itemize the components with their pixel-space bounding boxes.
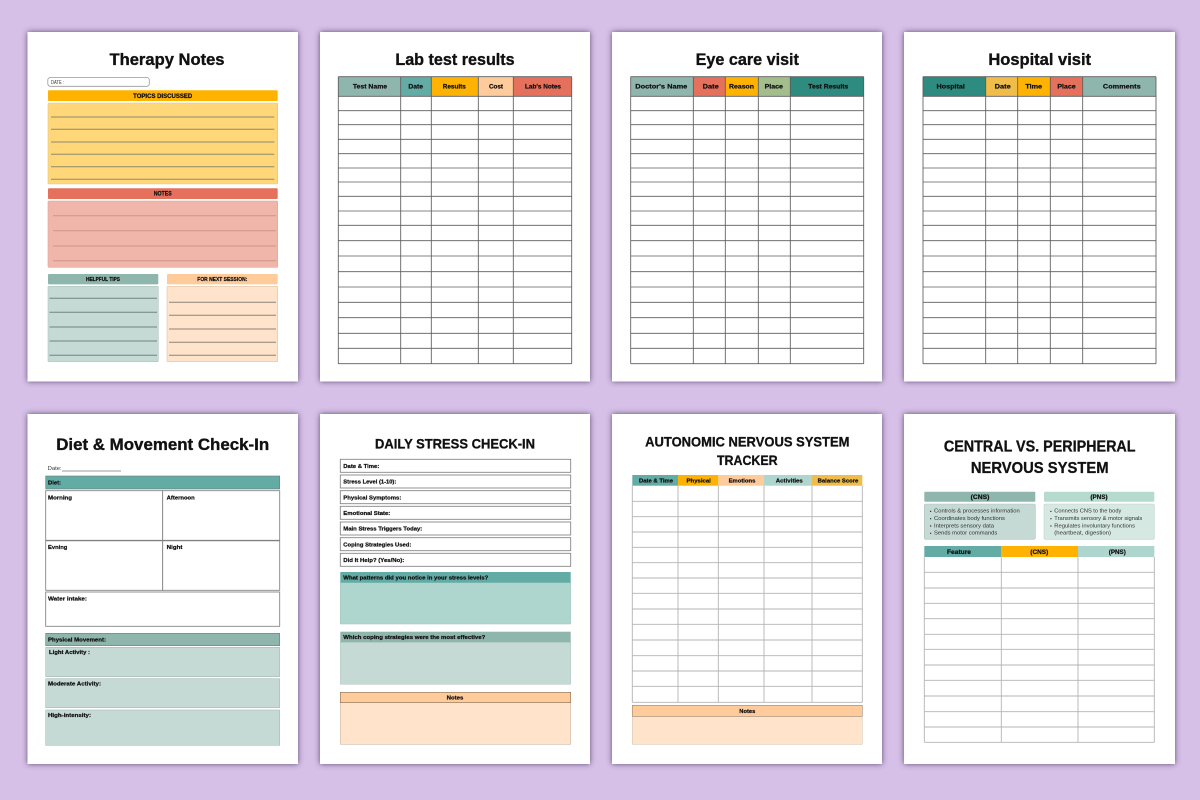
section: for next session: FOR NEXT SESSION:	[197, 277, 247, 283]
section: diet: Water intake:	[48, 597, 87, 603]
title: central vs peripheral	[944, 438, 1136, 477]
card: CNS: Sends motor commands	[934, 531, 998, 537]
section: diet: Night	[167, 545, 183, 551]
table: eye care visit: Doctor's Name	[635, 85, 688, 91]
table: tracker: Physical	[687, 478, 711, 484]
card: CNS: Interprets sensory data	[934, 523, 994, 529]
table: comparison: (CNS)	[1030, 550, 1048, 556]
table: eye care visit: Reason	[729, 85, 754, 91]
table: lab test results	[338, 77, 572, 364]
panel: hospital visit	[904, 32, 1175, 382]
table: tracker: Emotions	[729, 478, 755, 484]
section: physical movement: High-intensity:	[48, 713, 91, 719]
panel: central vs peripheral nervous system	[904, 414, 1175, 764]
date line: Date:	[48, 466, 62, 472]
card: PNS: (PNS)	[1090, 495, 1108, 501]
table: lab test results: Cost	[489, 85, 503, 91]
section: diet	[46, 476, 280, 626]
section: notes	[48, 188, 278, 267]
table: eye care visit	[631, 77, 864, 364]
card: PNS: Regulates involuntary functions	[1054, 523, 1135, 529]
title: autonomic nervous system tracker: AUTONOMIC NERVOUS SYSTEM	[645, 434, 849, 450]
title: central vs peripheral: NERVOUS SYSTEM	[971, 460, 1109, 477]
table: hospital visit: Place	[1057, 85, 1076, 91]
title: diet and movement: Diet & Movement Check-In	[56, 435, 269, 454]
table: comparison: Feature	[947, 550, 972, 556]
table: tracker	[632, 475, 862, 702]
section: helpful tips	[48, 274, 158, 362]
table: eye care visit: Date	[703, 85, 720, 91]
date field	[48, 78, 149, 86]
section: diet: Morning	[48, 495, 72, 501]
card: CNS: (CNS)	[971, 495, 989, 501]
date line	[48, 466, 121, 472]
section: notes	[632, 705, 862, 744]
card: PNS: (heartbeat, digestion)	[1054, 531, 1111, 537]
form fields: Coping Strategies Used:	[343, 542, 411, 548]
section: stress patterns: What patterns did you notice in your stress levels?	[343, 575, 489, 581]
table: tracker: Activities	[776, 478, 803, 484]
panel: therapy notes	[28, 32, 298, 382]
table: hospital visit: Date	[995, 85, 1012, 91]
section: diet: Diet:	[48, 480, 61, 486]
panel: lab test results	[320, 32, 590, 382]
table: eye care visit: Test Results	[808, 85, 849, 91]
table: tracker: Date & Time	[639, 478, 673, 484]
form fields: Emotional State:	[343, 511, 390, 517]
section: notes: NOTES	[154, 192, 172, 198]
form fields: Physical Symptoms:	[343, 495, 401, 501]
section: diet: Evning	[48, 545, 67, 551]
panel: eye care visit	[612, 32, 882, 382]
panel: diet and movement check-in	[28, 414, 298, 764]
title: autonomic nervous system tracker: TRACKER	[717, 452, 778, 468]
title: eye care visit: Eye care visit	[696, 50, 799, 69]
form fields	[340, 459, 571, 566]
table: lab test results: Test Name	[353, 85, 388, 91]
table: lab test results: Lab's Notes	[525, 85, 562, 91]
section: notes: Notes	[447, 696, 463, 702]
table: hospital visit	[923, 77, 1156, 364]
table: hospital visit: Time	[1025, 85, 1043, 91]
title: central vs peripheral: CENTRAL VS. PERIPHERAL	[944, 438, 1136, 455]
card: PNS	[1044, 492, 1154, 539]
table: comparison	[924, 546, 1154, 742]
panel: daily stress check-in	[320, 414, 590, 764]
section: notes	[340, 692, 571, 744]
date field: DATE :	[51, 80, 64, 86]
card: CNS: Controls & processes information	[934, 509, 1020, 515]
section: helpful tips: HELPFUL TIPS	[86, 277, 120, 283]
title: lab test results: Lab test results	[395, 50, 515, 69]
panel: autonomic nervous system tracker	[612, 414, 882, 764]
section: diet: Afternoon	[167, 495, 195, 501]
section: for next session	[167, 274, 278, 362]
section: physical movement: Moderate Activity:	[48, 682, 101, 688]
table: comparison: (PNS)	[1109, 550, 1126, 556]
section: coping strategies: Which coping strategies were the most effective?	[343, 635, 486, 641]
title: hospital visit: Hospital visit	[988, 50, 1091, 69]
title: therapy notes: Therapy Notes	[110, 50, 224, 69]
table: lab test results: Date	[408, 85, 424, 91]
table: tracker: Balance Score	[818, 478, 858, 484]
table: eye care visit: Place	[765, 85, 784, 91]
section: notes: Notes	[739, 709, 755, 715]
section: coping strategies	[340, 632, 571, 684]
section: physical movement: Light Activity :	[49, 650, 90, 656]
form fields: Main Stress Triggers Today:	[343, 527, 422, 533]
title: autonomic nervous system tracker	[645, 434, 849, 468]
table: lab test results: Results	[443, 85, 466, 91]
table: hospital visit: Hospital	[937, 85, 965, 91]
section: physical movement	[46, 633, 280, 745]
table: hospital visit: Comments	[1103, 85, 1141, 91]
card: CNS	[924, 492, 1035, 539]
section: stress patterns	[340, 572, 571, 624]
form fields: Did It Help? (Yes/No):	[343, 558, 404, 564]
card: PNS: Transmits sensory & motor signals	[1054, 516, 1143, 522]
section: physical movement: Physical Movement:	[48, 637, 106, 643]
section: topics discussed	[48, 90, 278, 184]
title: daily stress check-in: DAILY STRESS CHECK-IN	[375, 436, 535, 452]
card: CNS: Coordinates body functions	[934, 516, 1005, 522]
card: PNS: Connects CNS to the body	[1054, 509, 1122, 515]
section: topics discussed: TOPICS DISCUSSED	[133, 94, 193, 100]
form fields: Date & Time:	[343, 464, 379, 470]
form fields: Stress Level (1-10):	[343, 480, 396, 486]
